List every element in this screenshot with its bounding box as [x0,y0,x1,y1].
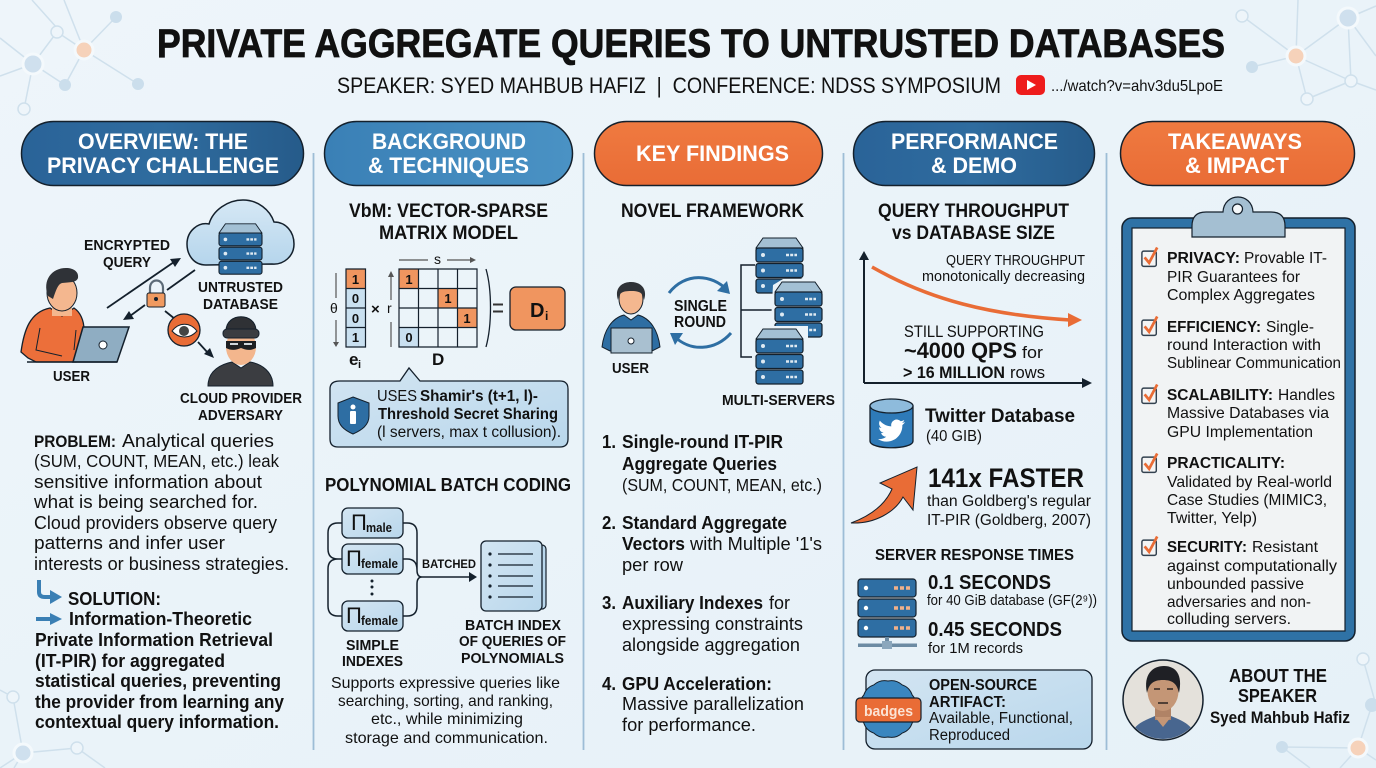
header: background: BACKGROUND [372,129,526,154]
header: background [324,122,572,186]
heading: VbM model [349,201,548,244]
finding 1 [602,432,822,495]
matrix D: 1 [405,272,413,287]
header: performance [854,122,1094,186]
heading: query throughput: QUERY THROUGHPUT [878,201,1069,222]
finding 2: per row [622,555,684,575]
text block: solution: statistical queries, preventing [35,671,281,691]
title: PRIVATE AGGREGATE QUERIES TO UNTRUSTED DATABASES [157,22,1225,66]
text block: solution: contextual query information. [35,712,279,732]
network decoration: bottom left [0,690,105,768]
chart: throughput curve [859,251,1092,388]
text block: polynomial description [331,675,560,747]
header: background: & TECHNIQUES [368,153,529,178]
chart: throughput curve: STILL SUPPORTING [904,323,1044,341]
vector e_i [330,269,366,371]
takeaway: privacy: Complex Aggregates [1167,287,1315,304]
index: female: Π [346,546,362,571]
diagram labels [53,238,302,424]
text block: problem: interests or business strategies. [34,553,289,574]
icon: adversary [208,317,273,386]
takeaway: security: SECURITY: [1167,539,1247,556]
takeaway: practicality: Twitter, Yelp) [1167,510,1257,527]
finding 4: Massive parallelization [622,694,804,714]
text block: problem: patterns and infer user [34,532,225,553]
labels: BATCH INDEX [465,618,561,634]
index: female 2: Π [346,603,362,628]
diagram: novel framework: USER [612,361,649,377]
finding 1: Single-round IT-PIR [622,432,783,452]
diagram: novel framework: ROUND [674,314,726,331]
icon: user [602,282,660,353]
takeaway: scalability: Handles [1278,387,1335,404]
network decoration: bottom right [1276,653,1376,768]
labels: INDEXES [342,654,403,670]
matrix D: 1 [444,291,452,306]
takeaway: practicality: PRACTICALITY: [1167,455,1285,472]
takeaway: security: against computationally [1167,558,1337,575]
header: overview: OVERVIEW: THE [78,129,248,154]
icon: cloud database [187,200,294,274]
text: response times: 0.1 SECONDS [928,571,1051,594]
icon: batch document [481,541,546,611]
takeaway: practicality: Validated by Real-world [1167,474,1332,491]
labels [342,618,566,670]
vector e_i: θ [330,300,338,316]
icon: youtube [1016,75,1045,95]
text block: solution: Private Information Retrieval [35,630,273,650]
takeaway: efficiency: Sublinear Communication [1167,355,1341,372]
header: key findings [594,122,822,186]
takeaway: efficiency: Single- [1266,319,1314,336]
takeaway: privacy: Provable IT- [1244,250,1327,267]
diagram: vector times matrix: × [371,301,380,318]
header: overview [22,122,304,186]
chart: throughput curve: QUERY THROUGHPUT [946,253,1085,269]
matrix D [387,251,490,369]
speaker portrait [1123,660,1203,740]
text: 141x faster: than Goldberg's regular [927,493,1091,510]
chart: throughput curve: > 16 MILLION [903,364,1005,382]
finding 3: Auxiliary Indexes [622,593,763,613]
vector e_i: i [358,359,361,371]
finding 4 [602,674,804,735]
icon: solution arrows [36,580,62,625]
text block: solution: SOLUTION: [68,589,161,609]
header: key findings: KEY FINDINGS [636,141,789,166]
text: response times: 0.45 SECONDS [928,618,1062,641]
matrix D: D [432,350,444,369]
arrows: single round [669,278,731,347]
takeaway: security: colluding servers. [1167,611,1291,628]
finding 3: 3. [602,593,616,613]
icon: badge: badges [864,703,913,720]
text block: problem: sensitive information about [34,471,262,492]
result D_i: D [530,300,544,322]
list: key findings [602,432,822,735]
text: response times: for 40 GiB database (GF(2⁹)) [927,593,1097,609]
finding 4: for performance. [622,715,756,735]
panel: open-source artifact: Available, Functional, [929,710,1073,727]
finding 2: 2. [602,513,616,533]
network decoration: top left [0,0,144,115]
text: response times: for 1M records [928,641,1023,657]
takeaway: practicality [1142,454,1332,527]
index: male: Π [351,510,367,535]
icon: server rack [858,579,917,649]
vector e_i: e [349,350,358,369]
text block: polynomial description: Supports expressive queries like [331,675,560,692]
finding 1: (SUM, COUNT, MEAN, etc.) [622,475,822,495]
callout: Shamir secret sharing: (l servers, max t collusion). [377,424,561,441]
takeaway: security: adversaries and non- [1167,594,1311,611]
takeaway: efficiency: round Interaction with [1167,337,1321,354]
diagram labels: USER [53,369,90,385]
labels: POLYNOMIALS [461,651,564,667]
takeaway: security: Resistant [1252,539,1319,556]
chart: throughput curve: rows [1010,364,1045,382]
text block: solution: the provider from learning any [35,692,284,712]
icon: twitter database [870,399,913,448]
result D_i: i [545,309,548,323]
index: male: male [366,521,392,535]
diagram labels: QUERY [103,255,151,271]
text block: solution: Information-Theoretic [69,609,252,629]
result D_i [510,287,565,330]
takeaway: security: unbounded passive [1167,576,1304,593]
vector e_i: 0 [352,311,359,326]
header: overview: PRIVACY CHALLENGE [47,153,279,178]
text block: problem: Cloud providers observe query [34,512,278,533]
takeaway: efficiency: EFFICIENCY: [1167,319,1261,336]
header: takeaways: TAKEAWAYS [1168,129,1302,154]
about the speaker [1210,665,1350,727]
heading: query throughput: vs DATABASE SIZE [892,223,1055,244]
diagram labels: UNTRUSTED [198,280,283,296]
text: 141x faster: IT-PIR (Goldberg, 2007) [927,512,1091,529]
index: female: female [361,557,398,571]
labels: SIMPLE [346,638,399,654]
diagram labels: ENCRYPTED [84,238,170,254]
matrix D: 0 [405,330,413,345]
diagram: vector times matrix [330,251,565,371]
chart: throughput curve: monotonically decreasing [922,269,1085,285]
takeaway: scalability: Massive Databases via [1167,405,1329,422]
header: takeaways [1120,122,1354,186]
takeaway: scalability [1142,384,1335,441]
panel: overview diagram [21,200,302,424]
diagram: novel framework [602,238,835,409]
index: male [342,508,403,538]
text block: polynomial description: etc., while minimizing [371,711,523,728]
text block: problem [33,430,289,574]
callout: Shamir secret sharing: USES [377,388,417,405]
vector e_i: 1 [352,272,359,287]
takeaway: privacy: PIR Guarantees for [1167,269,1301,286]
heading: novel framework: NOVEL FRAMEWORK [621,201,804,222]
finding 3 [602,593,803,655]
takeaway: practicality: Case Studies (MIMIC3, [1167,492,1327,509]
dividers [314,153,1106,750]
takeaway: privacy: PRIVACY: [1167,250,1240,267]
index: female 2 [342,601,403,631]
icon: user with laptop [21,268,129,362]
labels: OF QUERIES OF [459,634,566,650]
about the speaker: Syed Mahbub Hafiz [1210,709,1350,727]
arrow: faster [851,467,917,523]
diagram labels: ADVERSARY [198,408,283,424]
diagram: novel framework: SINGLE [674,298,727,315]
icon: lock [147,280,165,307]
heading: VbM model: MATRIX MODEL [379,223,518,244]
finding 2 [602,513,822,575]
matrix D: 1 [463,311,471,326]
text block: polynomial description: storage and communication. [345,730,548,747]
finding 2: Vectors [622,534,685,554]
finding 1: Aggregate Queries [622,454,777,474]
finding 3: alongside aggregation [622,635,800,655]
heading: polynomial batch coding: POLYNOMIAL BATCH CODING [325,475,571,495]
text block: problem: (SUM, COUNT, MEAN, etc.) leak [34,451,279,471]
vector e_i: 0 [352,291,359,306]
finding 2: with Multiple '1's [689,534,822,554]
takeaway: scalability: SCALABILITY: [1167,387,1273,404]
icon: servers [752,238,826,390]
finding 2: Standard Aggregate [622,513,787,533]
panel: takeaways clipboard [1122,197,1355,641]
icon: info shield [338,397,369,434]
finding 4: GPU Acceleration: [622,674,772,694]
clipboard clip [1192,197,1285,237]
text: twitter database: (40 GIB) [926,428,982,445]
callout: Shamir secret sharing: Threshold Secret Sharing [378,406,558,423]
icon: badge [856,681,921,737]
text block: problem: PROBLEM: [34,432,116,451]
arrow: query to cloud [107,258,214,358]
matrix D: r [387,300,392,316]
text: 141x faster [927,463,1091,529]
takeaway: security [1142,536,1337,628]
chart: throughput curve: for [1022,344,1044,362]
text block: problem: Analytical queries [122,430,274,451]
panel: open-source artifact: OPEN-SOURCE [929,677,1037,694]
youtube link: .../watch?v=ahv3du5LpoE [1051,78,1223,95]
text: 141x faster: 141x FASTER [928,463,1084,493]
text block: solution [35,589,284,732]
callout: Shamir secret sharing: Shamir's (t+1, l)- [420,388,538,405]
diagram labels: DATABASE [203,297,278,313]
subtitle: speaker and conference: SPEAKER: SYED MAHBUB HAFIZ | CONFERENCE: NDSS SYMPOSIUM [337,73,1001,98]
text: twitter database: Twitter Database [925,405,1075,427]
text block: solution: (IT-PIR) for aggregated [35,651,225,671]
text: response times [927,571,1097,657]
diagram: polynomial batching [328,508,566,670]
about the speaker: SPEAKER [1238,685,1317,706]
heading: server response times: SERVER RESPONSE TIMES [875,547,1074,564]
text: twitter database [925,405,1075,445]
header: takeaways: & IMPACT [1185,153,1289,178]
index: female 2: female [361,614,398,628]
vector e_i: 1 [352,330,359,345]
header: performance: & DEMO [931,153,1017,178]
heading: query throughput [878,201,1069,244]
finding 3: expressing constraints [622,614,803,634]
takeaway: scalability: GPU Implementation [1167,424,1313,441]
index: female [342,544,403,574]
finding 3: for [769,593,790,613]
finding 1: 1. [602,432,616,452]
callout: Shamir secret sharing [330,368,568,447]
icon: eye [168,314,200,346]
text block: polynomial description: searching, sorting, and ranking, [338,693,553,710]
panel: open-source artifact [856,670,1092,749]
chart: throughput curve: ~4000 QPS [904,338,1017,363]
diagram labels: CLOUD PROVIDER [180,391,302,407]
takeaway: privacy [1142,248,1327,304]
header: performance: PERFORMANCE [891,129,1058,154]
about the speaker: ABOUT THE [1229,665,1327,686]
network decoration: top right [1236,0,1376,105]
panel: open-source artifact: Reproduced [929,727,1010,744]
diagram: novel framework: MULTI-SERVERS [722,393,835,409]
panel: open-source artifact: ARTIFACT: [929,694,1006,711]
finding 4: 4. [602,674,616,694]
diagram: polynomial batching: BATCHED [422,557,476,571]
takeaway: efficiency [1142,316,1341,372]
heading: VbM model: VbM: VECTOR-SPARSE [349,201,548,222]
text block: problem: what is being searched for. [33,491,258,512]
matrix D: s [434,251,441,267]
